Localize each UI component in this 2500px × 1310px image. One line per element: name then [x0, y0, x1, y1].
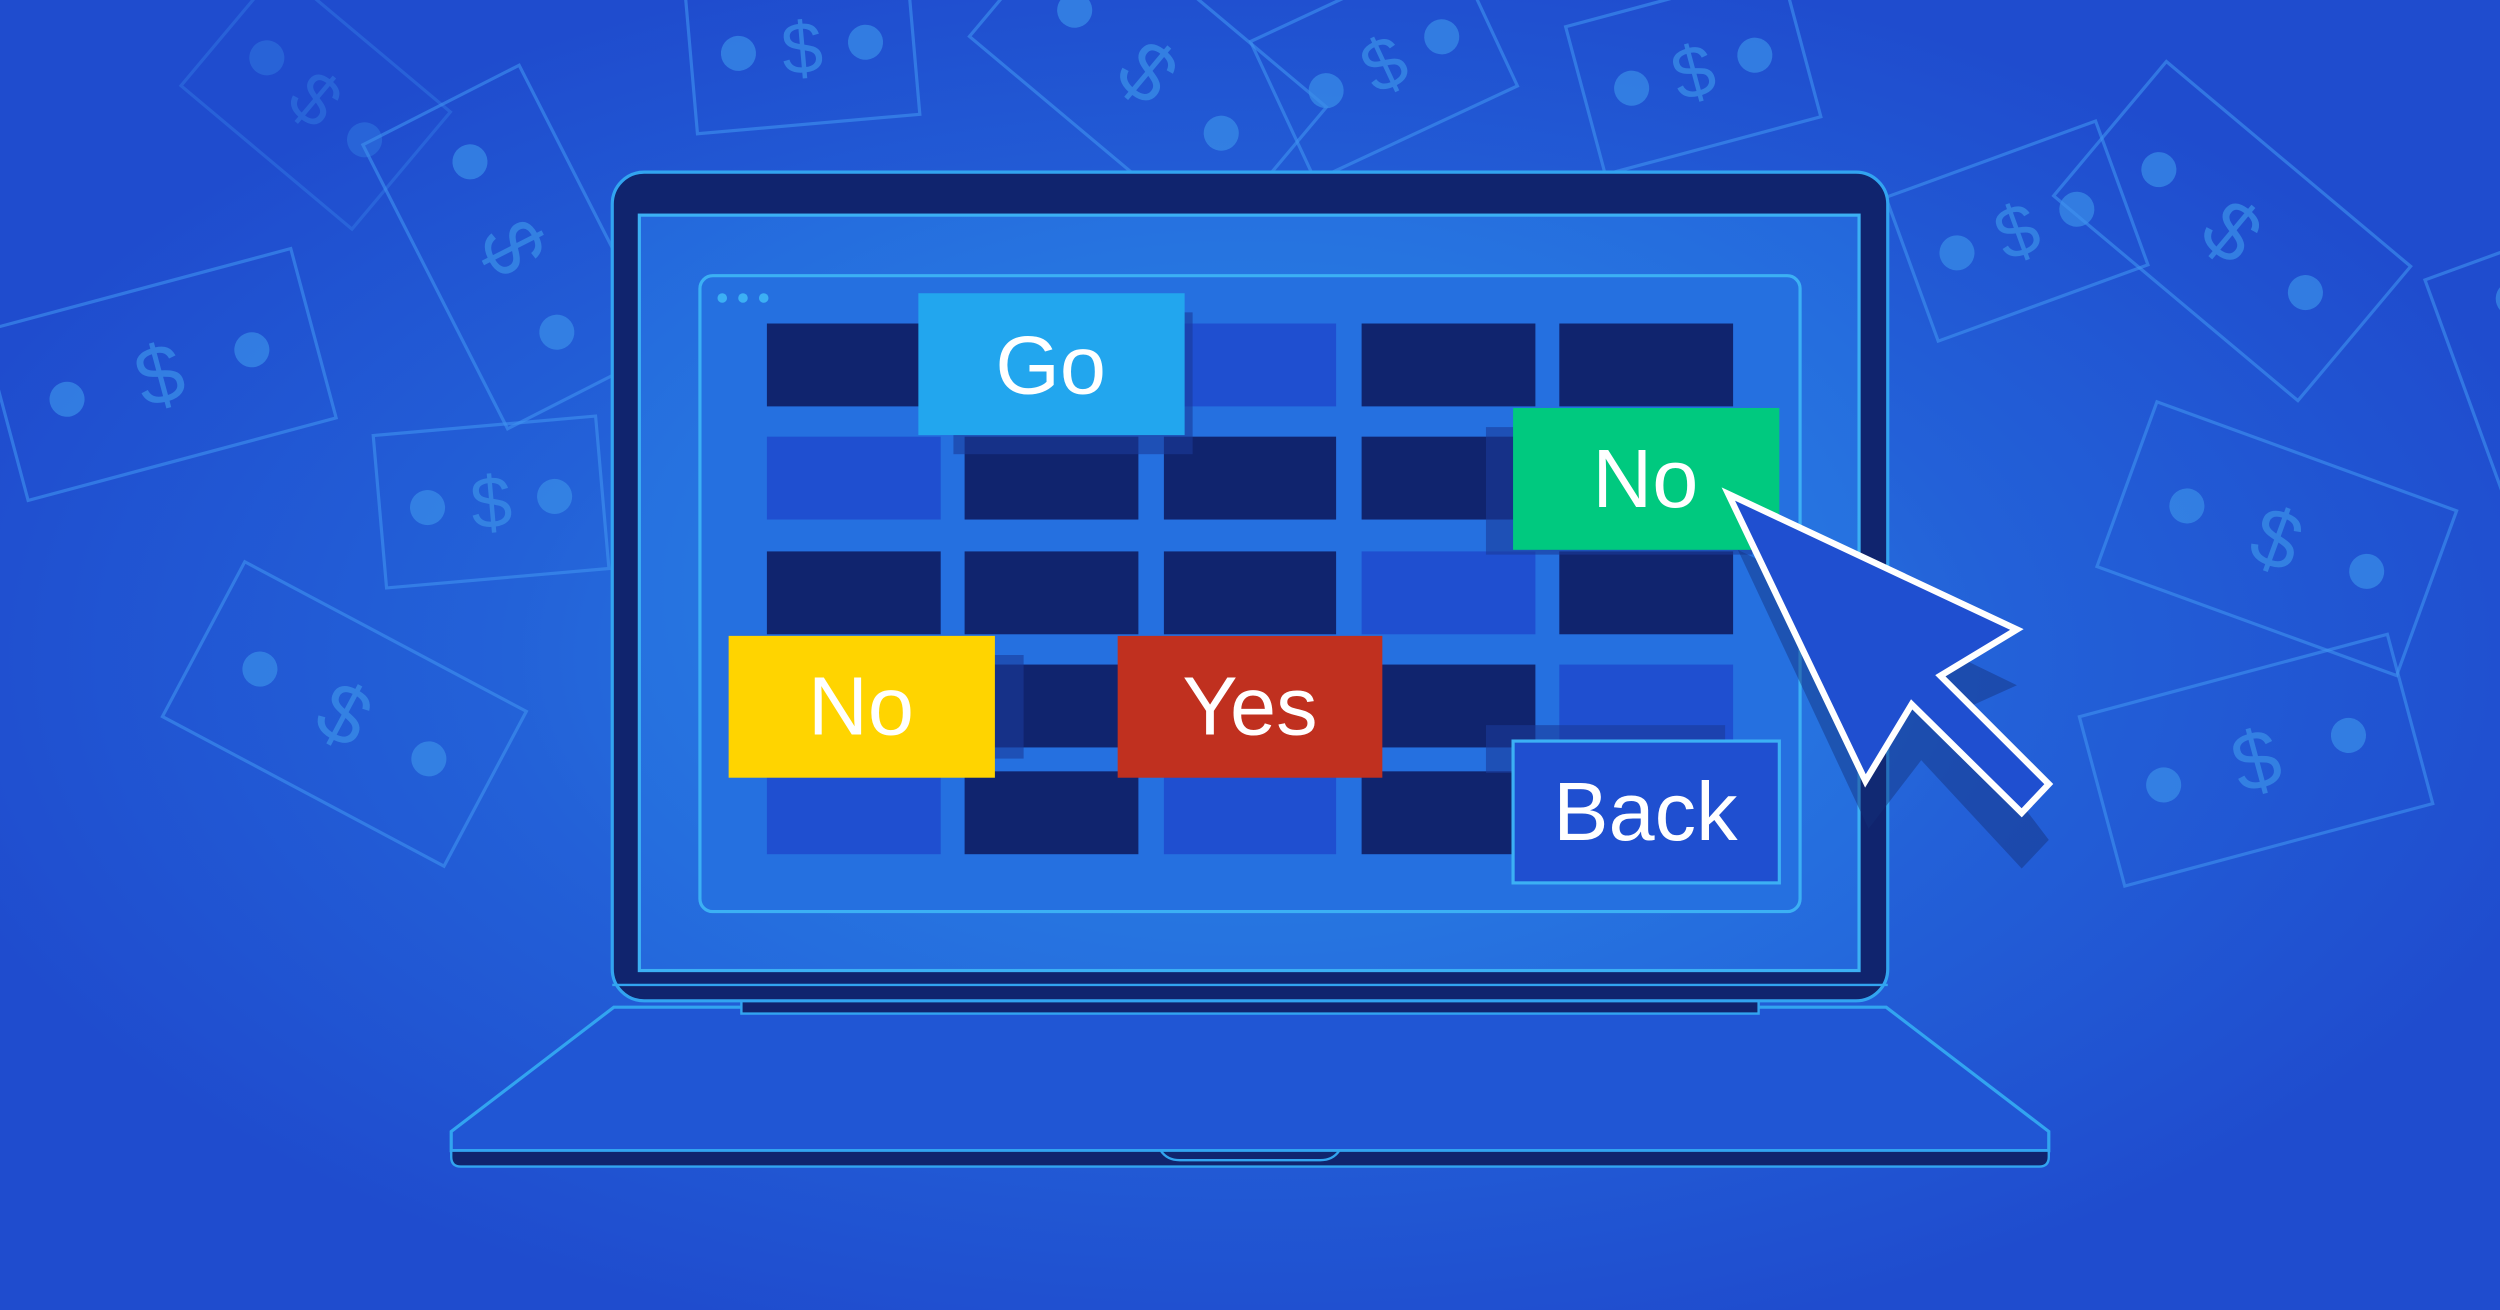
- grid of tiles: [767, 324, 1733, 854]
- button: No green: No: [1592, 432, 1698, 525]
- button: Go: Go: [995, 319, 1106, 412]
- laptop base: [451, 1007, 2049, 1151]
- button: Yes: Yes: [1182, 660, 1318, 753]
- browser window: [700, 276, 1800, 912]
- button: Back: Back: [1553, 765, 1738, 858]
- screen: [639, 215, 1859, 971]
- button: No yellow: [729, 636, 1024, 778]
- button: Back: [1486, 725, 1779, 883]
- button: No yellow: No: [808, 660, 914, 753]
- laptop: [451, 172, 2049, 1167]
- button: Go: [918, 293, 1193, 454]
- cursor arrow: [1728, 494, 2049, 869]
- button: No green: [1486, 408, 1779, 555]
- money bills background: [0, 0, 2500, 886]
- button: Yes: [1118, 636, 1382, 778]
- laptop lid: [612, 172, 1888, 1001]
